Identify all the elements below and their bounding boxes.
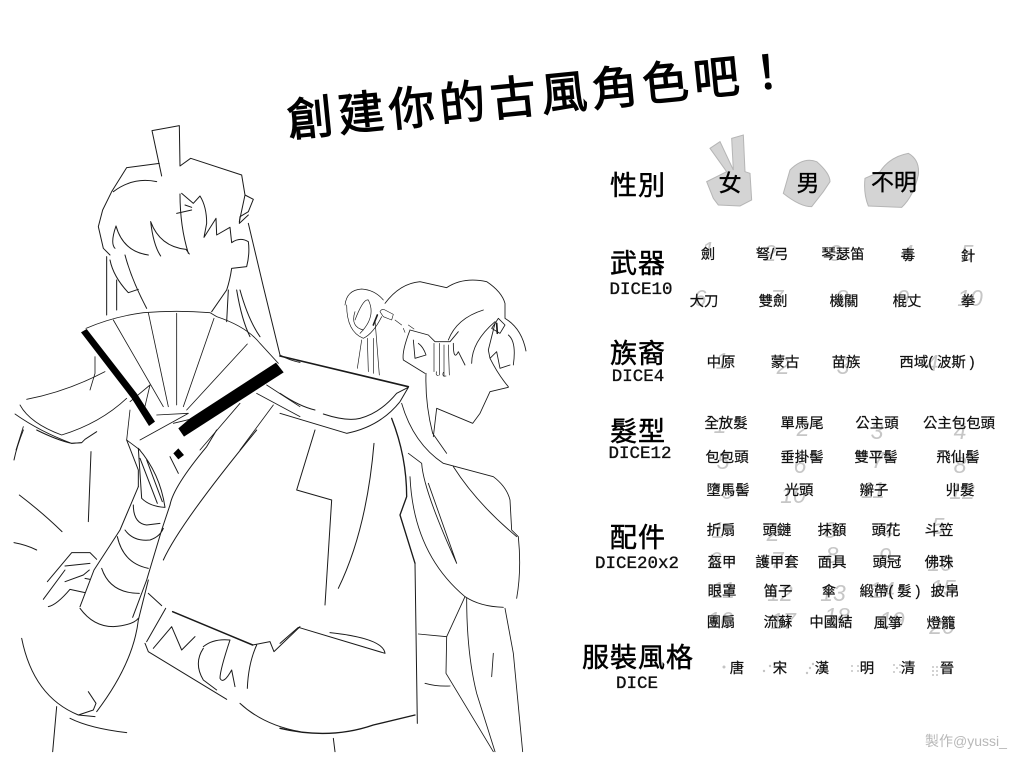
dice label: DICE20x2	[595, 554, 679, 574]
gray dice numbers: 8	[836, 285, 849, 311]
options: accessories: 盔甲	[708, 554, 736, 571]
options: weapons: 毒	[901, 247, 915, 264]
options: accessories: 中國結	[809, 614, 853, 631]
options: accessories: 頭冠	[873, 555, 901, 571]
options: weapons: 棍丈	[893, 293, 921, 310]
heading: clothing style: 服裝風格	[582, 643, 694, 673]
gray dice numbers: 19	[879, 607, 905, 633]
options: clothing style: 清	[901, 660, 915, 677]
gray dice numbers: 8	[826, 542, 839, 568]
panel: lineage	[610, 339, 975, 387]
options: hairstyle: 飛仙髻	[936, 448, 980, 466]
heading: gender: 性別	[610, 171, 666, 201]
options: accessories: 緞帶( 髮 )	[860, 583, 920, 600]
options: hairstyle	[704, 415, 996, 499]
gray dice numbers: 4	[901, 240, 913, 266]
options: weapons: 機關	[830, 293, 858, 310]
dice label: DICE10	[609, 280, 673, 300]
gray dice numbers: 4	[954, 418, 966, 444]
options: hairstyle: 公主包包頭	[923, 415, 996, 432]
gray dice numbers: 3	[824, 517, 837, 543]
gray dice numbers: 13	[820, 580, 846, 606]
options: accessories: 頭鏈	[763, 522, 791, 539]
gray dice numbers	[707, 513, 956, 639]
gray dice numbers: 10	[780, 482, 806, 508]
options: accessories: 抹額	[818, 522, 846, 539]
credit: 製作@yussi_	[925, 733, 1007, 749]
gray dice numbers	[694, 237, 983, 311]
icon: paper hand	[865, 153, 919, 207]
gray dice numbers: 1	[712, 517, 724, 543]
gray dice numbers: 2	[796, 415, 810, 441]
gray dice dots	[722, 663, 938, 676]
gray dice numbers: 3	[837, 353, 850, 379]
options: hairstyle: 光頭	[785, 482, 814, 499]
gray dice numbers: 3	[871, 418, 884, 444]
head, bun and hair	[345, 280, 526, 387]
options: gender: 男	[796, 170, 820, 196]
panel: accessories	[595, 513, 959, 639]
options: hairstyle: 垂掛髻	[780, 448, 824, 466]
panel: hairstyle	[608, 412, 996, 508]
options: weapons: 針	[961, 248, 975, 265]
gray dice numbers: 4	[926, 350, 938, 376]
gray dice numbers: 6	[709, 547, 722, 573]
panel: weapons	[609, 237, 983, 311]
options: accessories: 團扇	[707, 614, 735, 631]
options: lineage: 苗族	[832, 354, 860, 371]
gray dice numbers: 2	[766, 520, 780, 546]
options: accessories: 流蘇	[764, 614, 792, 631]
gray dice numbers	[716, 348, 938, 379]
title: 創建你的古風角色吧！	[285, 44, 797, 147]
options: hairstyle: 墮馬髻	[706, 481, 750, 499]
options: hairstyle: 單馬尾	[780, 416, 824, 432]
panel: clothing style	[582, 643, 954, 694]
options: accessories: 佛珠	[925, 554, 954, 571]
gray dice numbers: 7	[872, 447, 886, 473]
gray dice numbers: 8	[954, 452, 967, 478]
options: accessories: 斗笠	[925, 522, 953, 539]
options: weapons: 弩/弓	[756, 246, 788, 263]
options: hairstyle: 公主頭	[855, 415, 899, 432]
gray dice numbers: 3	[829, 240, 842, 266]
options: gender: 不明	[871, 169, 917, 195]
gray dice numbers: 5	[717, 448, 730, 474]
gray dice numbers: 17	[770, 608, 797, 634]
dice label: DICE	[616, 674, 658, 694]
options: accessories: 風箏	[874, 615, 902, 632]
gray dice numbers: 12	[949, 478, 975, 504]
gray dice numbers: 2	[763, 240, 777, 266]
icon: scissors hand	[707, 135, 752, 206]
gray dice numbers: 20	[928, 613, 955, 639]
fan black guards	[81, 329, 284, 437]
heading: weapons: 武器	[610, 249, 666, 279]
gray dice numbers: 1	[714, 412, 726, 438]
options: hairstyle: 包包頭	[705, 449, 749, 466]
gray dice numbers: 16	[707, 607, 733, 633]
dice label: DICE4	[612, 367, 664, 387]
options: clothing style: 唐	[730, 660, 744, 677]
options: weapons: 琴瑟笛	[821, 246, 865, 263]
options: hairstyle: 全放髮	[704, 415, 748, 432]
options: gender: 女	[718, 170, 742, 196]
options: weapons: 劍	[701, 246, 715, 263]
gray dice numbers: 18	[824, 603, 850, 629]
options: accessories: 燈籠	[927, 614, 955, 632]
options: gender	[718, 169, 917, 196]
gray dice numbers: 5	[961, 240, 974, 266]
gray dice numbers: 10	[957, 285, 983, 311]
head and hair	[15, 126, 300, 450]
dice label: DICE12	[608, 444, 672, 464]
options: lineage: 中原	[707, 354, 735, 371]
options: accessories: 折扇	[707, 522, 735, 539]
gray dice numbers: 14	[869, 577, 895, 603]
options: weapons: 雙劍	[759, 293, 787, 310]
options: hairstyle: 雙平髻	[854, 448, 898, 466]
gray dice numbers: 10	[927, 550, 953, 576]
gray dice numbers: 9	[879, 543, 892, 569]
illustration: male figure with fan	[14, 126, 417, 752]
options: lineage: 西域( 波斯 )	[899, 354, 975, 371]
illustration: female figure	[345, 280, 526, 752]
options: clothing style: 明	[860, 661, 874, 677]
gray dice numbers: 7	[771, 547, 785, 573]
gray dice numbers: 11	[861, 477, 885, 503]
gray dice numbers: 4	[881, 517, 893, 543]
options: hairstyle: 丱髮	[946, 482, 974, 499]
gray dice numbers: 9	[722, 478, 735, 504]
options: clothing style	[730, 660, 954, 677]
gray dice numbers: 11	[711, 577, 735, 603]
gray dice numbers	[714, 412, 975, 508]
heading: hairstyle: 髮型	[610, 417, 666, 447]
options: lineage: 蒙古	[771, 354, 799, 371]
panel: gender	[610, 135, 919, 207]
gray dice numbers: 6	[694, 285, 707, 311]
sleeve and arm	[14, 430, 300, 752]
options: weapons: 大刀	[690, 293, 718, 310]
options: accessories: 披帛	[931, 583, 959, 600]
gray dice numbers: 1	[716, 348, 728, 374]
gray dice numbers: 5	[932, 513, 945, 539]
icon: rock hand	[783, 160, 830, 207]
gray dice numbers: 2	[776, 353, 790, 379]
gray dice numbers: 7	[771, 285, 785, 311]
options: accessories: 笛子	[764, 583, 792, 600]
options: accessories: 面具	[818, 555, 846, 571]
options: lineage	[707, 354, 975, 371]
options: accessories: 護甲套	[755, 554, 799, 571]
options: accessories: 眼罩	[708, 584, 736, 600]
options: hairstyle: 辮子	[860, 482, 888, 499]
gray dice numbers: 12	[767, 580, 793, 606]
options: weapons: 拳	[961, 293, 976, 310]
cloak body	[280, 356, 417, 752]
options: weapons	[690, 246, 976, 310]
gray dice numbers: 15	[930, 575, 956, 601]
options: clothing style: 漢	[815, 660, 829, 677]
face, torso and arm	[402, 373, 523, 752]
gray dice numbers: 6	[794, 452, 807, 478]
options: clothing style: 宋	[773, 660, 787, 677]
options: clothing style: 晉	[940, 661, 954, 677]
heading: lineage: 族裔	[610, 339, 666, 369]
options: accessories: 傘	[822, 583, 836, 600]
gray dice numbers: 9	[897, 285, 910, 311]
heading: accessories: 配件	[610, 523, 666, 553]
options: accessories: 頭花	[872, 522, 900, 539]
options: accessories	[707, 522, 959, 632]
gray dice numbers: 1	[702, 237, 714, 263]
